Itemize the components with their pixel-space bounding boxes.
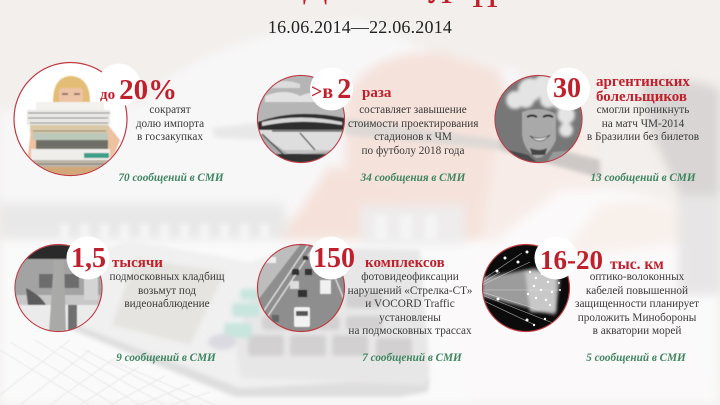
description: в Бразилии без билетов <box>587 131 699 143</box>
media count: 7 сообщений в СМИ <box>362 352 462 364</box>
description: проложить Минобороны <box>578 312 696 324</box>
description <box>109 271 225 310</box>
item: traffic cameras <box>313 243 472 364</box>
description: по футболу 2018 года <box>362 144 464 156</box>
description: кабелей повышенной <box>586 284 688 296</box>
description: фотовидеофиксации <box>361 271 459 283</box>
headline number: 150 <box>313 243 355 274</box>
photo circle: cemetery cross <box>15 244 105 332</box>
description: защищенности планирует <box>575 298 699 310</box>
description: оптико-волоконных <box>590 271 684 283</box>
date range: 16.06.2014—22.06.2014 <box>268 17 452 37</box>
media count: 13 сообщений в СМИ <box>590 172 696 184</box>
description: возьмут под <box>138 284 196 296</box>
photo circle: woman with paper stack <box>14 62 127 176</box>
description: смогли проникнуть <box>597 104 689 116</box>
headline number: 30 <box>553 73 581 104</box>
headline number: 16-20 <box>540 245 603 275</box>
description: стадионов к ЧМ <box>374 131 452 143</box>
white number badges <box>66 64 590 280</box>
item: Argentine fans <box>553 73 699 184</box>
description: в акватории морей <box>593 325 681 337</box>
photo circle: stadium <box>255 75 347 166</box>
description: долю импорта <box>136 118 204 130</box>
description: на подмосковных трассах <box>348 325 472 337</box>
photo circle: highway traffic <box>258 244 345 332</box>
item: fibre-optic cables <box>540 245 699 364</box>
headline number: 1,5 <box>71 243 106 274</box>
description: видеонаблюдение <box>124 298 210 310</box>
title (cropped at top edge) <box>303 0 498 10</box>
headline number: до 20% <box>100 74 177 106</box>
description: нарушений «Стрелка-СТ» <box>348 284 472 296</box>
headline label: болельщиков <box>596 89 687 105</box>
item: cemeteries <box>71 243 225 364</box>
description <box>136 104 204 143</box>
calculator <box>68 240 430 397</box>
photo circle: Argentine fan <box>495 74 585 165</box>
description: в госзакупках <box>137 131 203 143</box>
media count: 34 сообщения в СМИ <box>361 172 465 184</box>
media count: 5 сообщений в СМИ <box>586 352 686 364</box>
media count: 9 сообщений в СМИ <box>116 352 216 364</box>
media count: 70 сообщений в СМИ <box>118 172 224 184</box>
description <box>348 104 478 156</box>
pen <box>212 118 600 178</box>
description: сократят <box>149 104 191 116</box>
headline number: >в 2 <box>311 74 351 105</box>
item: import reduction <box>100 74 224 184</box>
description <box>575 271 699 337</box>
description: подмосковных кладбищ <box>109 271 225 283</box>
description: установлены <box>379 312 441 324</box>
description: составляет завышение <box>359 104 467 116</box>
spiral binder <box>60 215 437 240</box>
description: и VOCORD Traffic <box>365 298 455 310</box>
description: на матч ЧМ-2014 <box>602 118 684 130</box>
headline label <box>596 74 690 105</box>
unit: комплексов <box>365 255 445 271</box>
unit: тысячи <box>112 255 163 271</box>
unit: тыс. км <box>610 256 664 273</box>
photo circle: optical fibres <box>482 244 570 332</box>
description <box>348 271 472 337</box>
item: stadium cost <box>311 74 478 184</box>
headline label: аргентинских <box>596 74 690 90</box>
unit: раза <box>362 85 391 101</box>
description <box>587 104 699 143</box>
description: стоимости проектирования <box>348 118 478 130</box>
spreadsheet paper <box>0 340 215 405</box>
